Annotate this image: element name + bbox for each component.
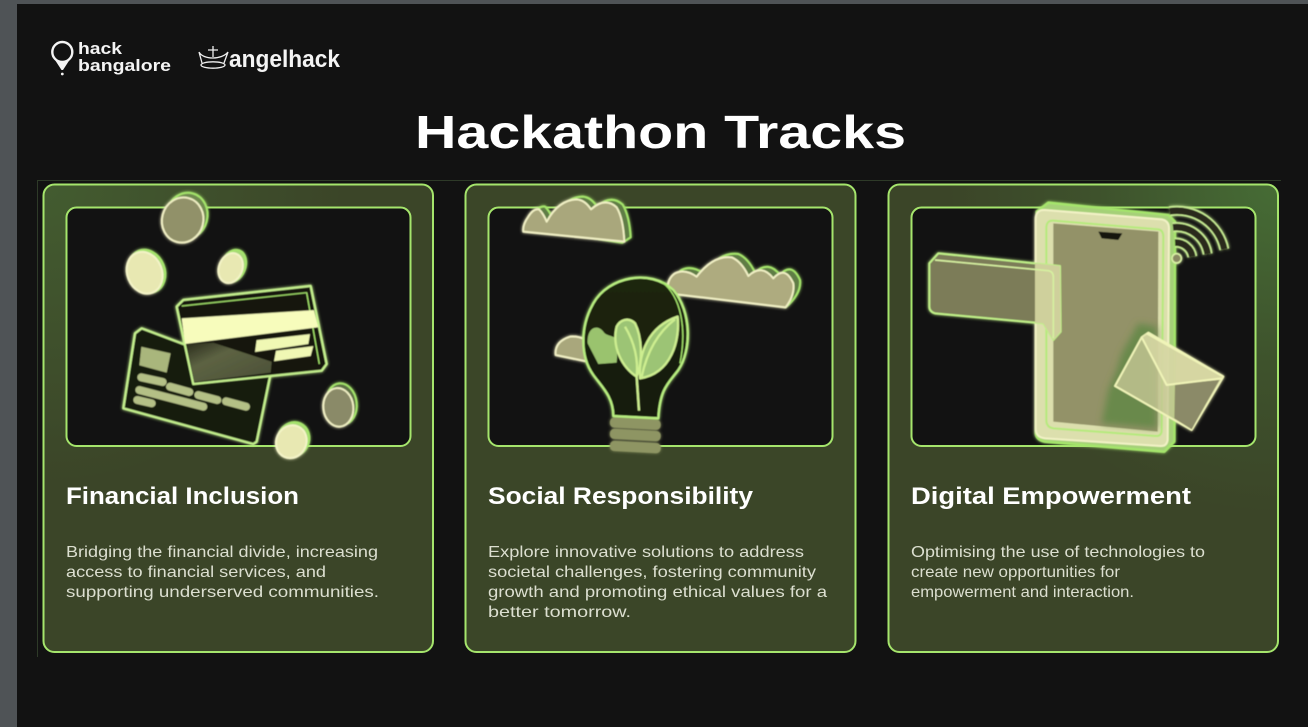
illustration: phone, message, envelope, wifi (929, 203, 1224, 452)
heading: Financial Inclusion (66, 483, 299, 510)
panel: digital empowerment (888, 184, 1278, 652)
logo: hack bangalore: hack (78, 39, 123, 58)
logo: angelhack: angelhack (229, 46, 341, 73)
logo: hack bangalore: bangalore (78, 56, 171, 75)
description: create new opportunities for (911, 564, 1121, 581)
description: Explore innovative solutions to address (488, 544, 804, 561)
panel: social responsibility (466, 184, 856, 652)
inner cloud (588, 328, 618, 364)
icon: map pin (52, 42, 72, 75)
front card (177, 286, 327, 384)
description: access to financial services, and (66, 564, 326, 581)
description: better tomorrow. (488, 604, 631, 621)
description (488, 544, 827, 621)
panel: financial inclusion (44, 184, 433, 652)
description (911, 544, 1205, 601)
description: growth and promoting ethical values for a (488, 584, 827, 601)
cloud top (523, 197, 631, 243)
illustration: bulb and clouds (523, 197, 800, 453)
description: societal challenges, fostering community (488, 564, 816, 581)
bulb (583, 278, 688, 418)
description: empowerment and interaction. (911, 584, 1134, 601)
logo: hack bangalore (52, 39, 171, 75)
phone (1036, 203, 1175, 452)
description: Bridging the financial divide, increasing (66, 544, 378, 561)
cloud right (668, 254, 800, 307)
heading: Digital Empowerment (911, 483, 1191, 510)
message bubble (929, 253, 1061, 340)
title: Hackathon Tracks (415, 106, 906, 158)
back card (123, 328, 270, 444)
envelope (1115, 333, 1223, 430)
description (66, 544, 379, 601)
description: supporting underserved communities. (66, 584, 379, 601)
heading: Social Responsibility (488, 483, 754, 510)
leaves (615, 317, 678, 411)
illustration: cards and coins (121, 188, 359, 463)
bulb base (610, 417, 661, 453)
cloud small (556, 337, 588, 362)
wifi (1170, 211, 1224, 263)
description: Optimising the use of technologies to (911, 544, 1205, 561)
coins (121, 188, 359, 463)
icon: crown (199, 46, 228, 68)
